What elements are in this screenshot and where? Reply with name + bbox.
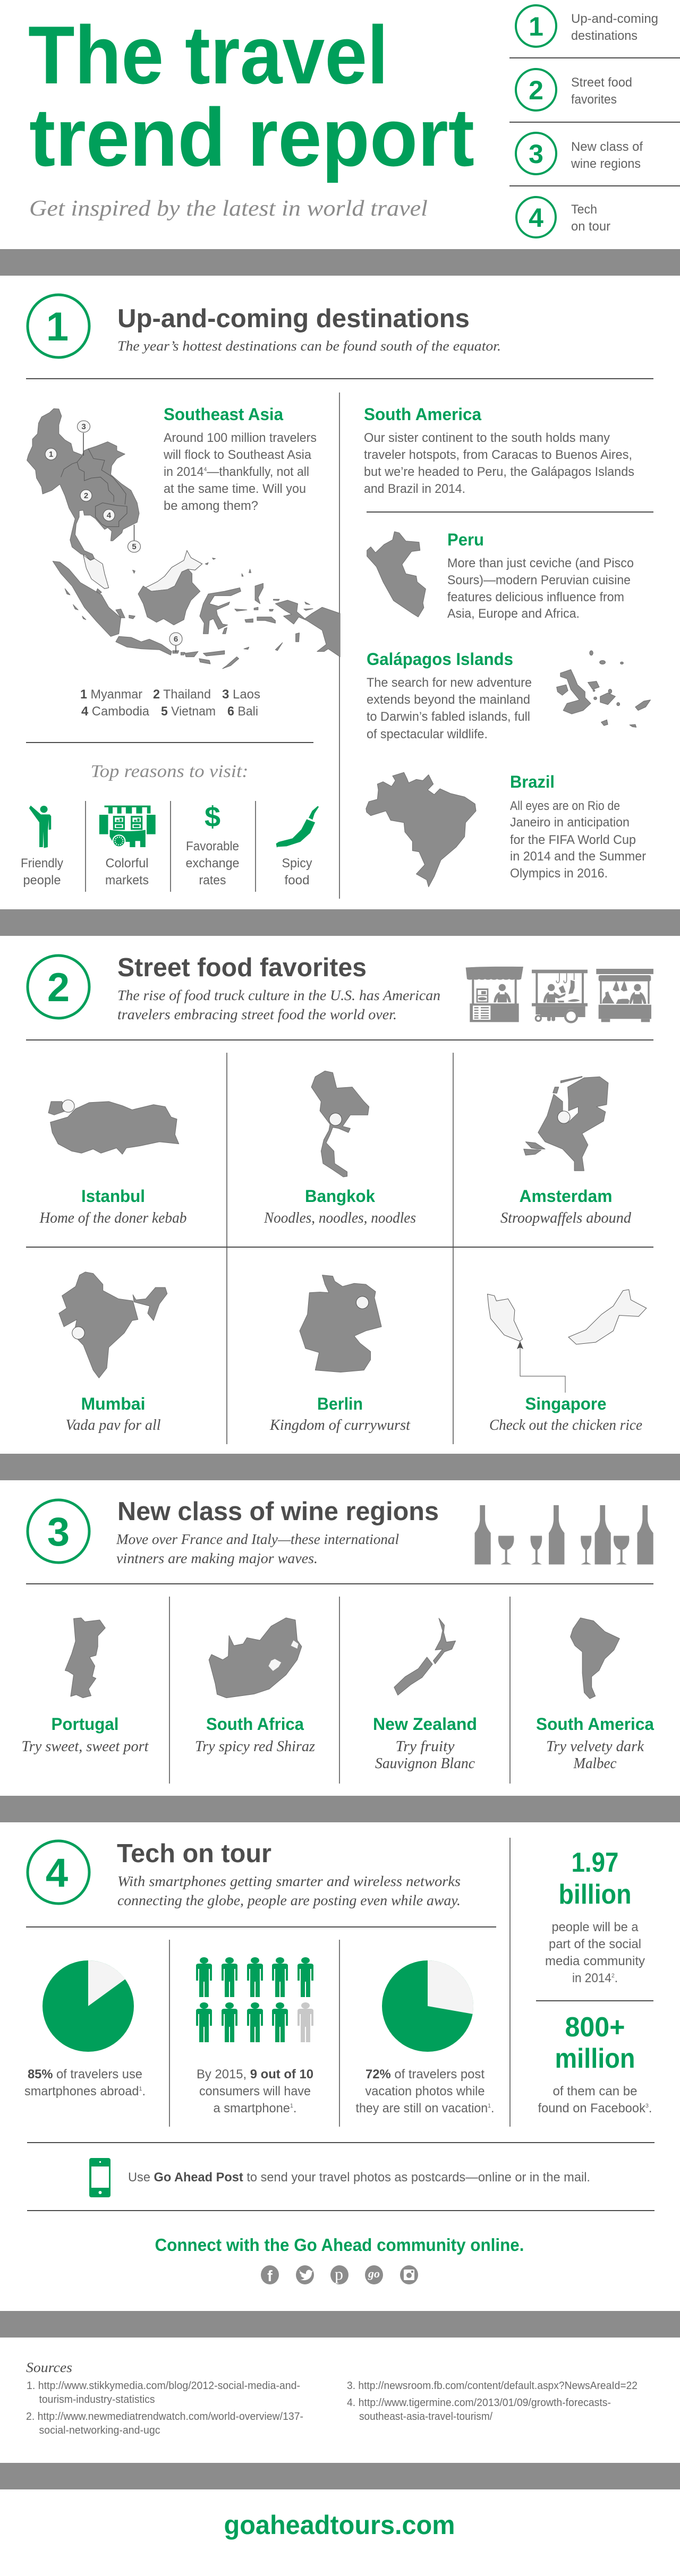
wine region: south america: South America: [536, 1715, 654, 1734]
stat: 1.97 billion: 1.97: [572, 1847, 618, 1878]
city: singapore: Singapore: [525, 1394, 607, 1413]
section number 4: [28, 1841, 89, 1904]
stat: 9 out of 10: a smartphone: [214, 2101, 291, 2116]
section 3 subhead: Move over France and Italy—these international: [116, 1531, 399, 1547]
stat: 85 percent: [24, 1960, 146, 2099]
wine region: new zealand: New Zealand: [373, 1715, 477, 1734]
reason: friendly people: [21, 806, 63, 888]
city: istanbul: [39, 1100, 187, 1226]
source 2: [26, 2411, 303, 2436]
stat: 9 out of 10: 1: [290, 2103, 293, 2109]
section 3 subhead: vintners are making major waves.: [116, 1550, 318, 1566]
city: istanbul: Istanbul: [81, 1187, 145, 1206]
section number 1: [28, 295, 89, 357]
sources: Sources: [26, 2360, 72, 2375]
peru text: Sours)—modern Peruvian cuisine: [447, 573, 631, 587]
map: southeast asia: [27, 408, 340, 669]
title: trend report: [29, 91, 474, 183]
source 1: [27, 2380, 300, 2406]
city: istanbul: Home of the doner kebab: [39, 1210, 187, 1226]
callouts: 3: [81, 422, 86, 431]
stat: 72 percent: vacation photos while: [366, 2084, 484, 2099]
wine region: south america: Malbec: [573, 1755, 617, 1772]
wine region: south america: Try velvety dark: [546, 1738, 644, 1755]
brazil text: [510, 772, 646, 881]
icon: waving person: [29, 806, 51, 848]
map: south america: [571, 1618, 619, 1699]
section number 2: [28, 956, 89, 1018]
icon: wine bottles and glasses: [475, 1505, 653, 1565]
pie chart: 85 percent: [42, 1960, 134, 2052]
map: portugal: [65, 1618, 105, 1698]
callouts: 4: [107, 511, 112, 520]
top reasons heading: Top reasons to visit:: [90, 762, 248, 781]
city: amsterdam: Stroopwaffels abound: [500, 1210, 632, 1226]
city: berlin: Kingdom of currywurst: [269, 1417, 411, 1434]
southeast asia text: [163, 405, 317, 513]
pie chart: 72 percent: [382, 1960, 473, 2052]
source 2: social-networking-and-ugc: [39, 2425, 160, 2436]
map: malaysia: [488, 1290, 647, 1344]
southeast asia text: Southeast Asia: [164, 405, 283, 424]
icon: facebook: f: [267, 2268, 273, 2285]
social icons: [261, 2264, 418, 2285]
section 4 subhead: [117, 1873, 461, 1908]
map: netherlands: [524, 1076, 608, 1171]
section 4 header: [28, 1839, 461, 1908]
toc item 3: [516, 133, 643, 174]
source 2: 2. http://www.newmediatrendwatch.com/world-overview/137-: [26, 2411, 303, 2423]
icon: chili pepper: [276, 806, 319, 848]
toc item 1: 1: [529, 12, 543, 41]
city: amsterdam: Amsterdam: [520, 1187, 612, 1206]
map: turkey: [48, 1100, 179, 1154]
map: india: [59, 1272, 167, 1378]
section 3 subhead: [116, 1531, 399, 1566]
icon: dollar sign: $: [205, 801, 220, 833]
map legend: 1 Myanmar: [80, 687, 142, 702]
toc item 4: [516, 197, 610, 237]
stat: 85 percent: 85% of travelers use: [28, 2067, 142, 2082]
connect heading: Connect with the Go Ahead community online.: [155, 2235, 524, 2255]
callouts: 2: [84, 491, 88, 500]
galapagos text: of spectacular wildlife.: [367, 727, 488, 741]
map: germany: [300, 1275, 381, 1372]
section 1 header: [28, 295, 501, 357]
stat: 1.97 billion: in 2014: [572, 1971, 614, 1985]
southeast asia text: be among them?: [164, 499, 258, 513]
southeast asia text: —thankfully, not all: [207, 465, 309, 479]
map: peru: [367, 532, 426, 617]
peru text: [447, 530, 634, 621]
sources: [26, 2360, 638, 2436]
stat: 1.97 billion: people will be a: [551, 1920, 639, 1934]
southeast asia text: in 2014: [164, 465, 206, 479]
icon: market cart: [99, 806, 156, 847]
wine region: new zealand: [373, 1618, 477, 1772]
wine region: south africa: Try spicy red Shiraz: [195, 1738, 315, 1755]
icon: pinterest: [330, 2264, 348, 2284]
south america intro: [364, 405, 634, 496]
stat: 800+ million: found on Facebook: [538, 2101, 647, 2116]
map legend: 2 Thailand: [153, 687, 211, 702]
peru text: Asia, Europe and Africa.: [447, 607, 580, 621]
wine region: new zealand: Sauvignon Blanc: [375, 1755, 475, 1772]
food grid dividers: [26, 1053, 653, 1444]
reason: spicy food: food: [285, 873, 309, 888]
stat: 85 percent: .: [142, 2084, 146, 2099]
reason: favorable exchange rates: [186, 801, 239, 888]
brazil text: Brazil: [510, 772, 555, 791]
stat: 72 percent: .: [491, 2101, 494, 2116]
toc item 1: [516, 5, 658, 47]
reason: friendly people: Friendly: [21, 856, 63, 871]
south america intro: South America: [364, 405, 481, 424]
peru text: features delicious influence from: [447, 590, 624, 604]
source 4: 4. http://www.tigermine.com/2013/01/09/growth-forecasts-: [347, 2397, 611, 2409]
toc item 4: 4: [529, 203, 543, 233]
source 4: [347, 2397, 611, 2423]
city: bangkok: Noodles, noodles, noodles: [264, 1210, 416, 1226]
city: mumbai: Vada pav for all: [66, 1417, 161, 1434]
southeast asia text: at the same time. Will you: [164, 482, 306, 496]
section number 4: 4: [46, 1850, 68, 1896]
stat: 72 percent: 72% of travelers post: [366, 2067, 484, 2082]
reason: spicy food: Spicy: [282, 856, 312, 871]
stat: 800+ million: [538, 2012, 652, 2116]
callouts: 6: [174, 635, 178, 644]
map: south africa: [209, 1618, 302, 1698]
southeast asia text: Around 100 million travelers: [164, 431, 317, 445]
icon: food stalls: [466, 967, 653, 1022]
wine region: portugal: Portugal: [51, 1715, 119, 1734]
map legend: 5 Vietnam: [161, 704, 216, 719]
icon: instagram: [400, 2265, 418, 2284]
map: new zealand: [394, 1618, 456, 1695]
brazil text: Janeiro in anticipation: [510, 815, 630, 830]
city: mumbai: [59, 1272, 167, 1434]
section 2 header: [28, 953, 440, 1022]
stall one: [466, 967, 523, 1022]
stat: 1.97 billion: media community: [545, 1954, 645, 1968]
stat: 9 out of 10: .: [293, 2101, 296, 2116]
southeast asia text: 4: [203, 466, 207, 473]
wine grid dividers: [169, 1597, 510, 1784]
stat: 800+ million: million: [555, 2043, 635, 2074]
wine region: portugal: [21, 1618, 149, 1755]
south america intro: and Brazil in 2014.: [364, 482, 465, 496]
stat: 9 out of 10: By 2015, 9 out of 10: [197, 2067, 313, 2082]
source 1: tourism-industry-statistics: [39, 2394, 155, 2406]
city: berlin: [269, 1275, 411, 1434]
city: singapore: Check out the chicken rice: [489, 1417, 642, 1434]
section number 1: 1: [46, 304, 69, 349]
wine region: south africa: [195, 1618, 315, 1755]
stat: 72 percent: 1: [488, 2103, 491, 2109]
galapagos text: The search for new adventure: [367, 676, 532, 690]
south america intro: traveler hotspots, from Caracas to Buenos Aires,: [364, 448, 632, 462]
toc item 1: Up-and-coming: [571, 12, 658, 26]
stat: 85 percent: 1: [139, 2086, 142, 2092]
icon: facebook: [261, 2265, 279, 2285]
city: amsterdam: [500, 1076, 632, 1226]
icon: go ahead: [365, 2265, 383, 2284]
stat: 1.97 billion: .: [615, 1971, 618, 1985]
map legend: [80, 687, 260, 719]
toc item 1: destinations: [571, 29, 638, 43]
heading: tech on tour: Tech on tour: [117, 1839, 271, 1868]
city: berlin: Berlin: [317, 1394, 363, 1413]
map legend: 3 Laos: [222, 687, 260, 702]
stat: 800+ million: 800+: [565, 2012, 625, 2043]
stat: 72 percent: [356, 1960, 494, 2116]
heading: new class of wine regions: New class of wine regions: [117, 1497, 439, 1526]
wine region: south africa: South Africa: [206, 1715, 304, 1734]
subtitle: Get inspired by the latest in world travel: [29, 197, 428, 221]
reason: favorable exchange rates: Favorable: [186, 839, 239, 854]
icon: twitter: [296, 2265, 314, 2284]
section number 3: 3: [47, 1509, 70, 1555]
section number 2: 2: [47, 965, 70, 1010]
city: singapore: [488, 1290, 647, 1434]
heading: up-and-coming destinations: Up-and-coming destinations: [117, 304, 470, 333]
table of contents: [509, 5, 680, 237]
south america intro: but we’re headed to Peru, the Galápagos Islands: [364, 465, 634, 479]
source 1: 1. http://www.stikkymedia.com/blog/2012-social-media-and-: [27, 2380, 300, 2392]
galapagos text: extends beyond the mainland: [367, 693, 530, 707]
stat: 1.97 billion: 2: [611, 1973, 615, 1979]
stat: 1.97 billion: part of the social: [549, 1937, 641, 1951]
icon: smartphone: [89, 2158, 110, 2197]
city: mumbai: Mumbai: [81, 1394, 146, 1413]
wine region: portugal: Try sweet, sweet port: [21, 1738, 149, 1755]
section 4 subhead: With smartphones getting smarter and wireless networks: [117, 1873, 461, 1889]
city: bangkok: Bangkok: [305, 1187, 375, 1206]
section 2 subhead: The rise of food truck culture in the U.S. has American: [117, 987, 440, 1003]
toc item 3: New class of: [571, 140, 643, 154]
toc item 2: [516, 69, 632, 110]
source 4: southeast-asia-travel-tourism/: [359, 2411, 492, 2423]
stat: 800+ million: .: [649, 2101, 652, 2116]
brazil text: in 2014 and the Summer: [510, 849, 646, 864]
title: [28, 9, 474, 183]
section 4 subhead: connecting the globe, people are posting even while away.: [117, 1892, 461, 1908]
section 2 subhead: travelers embracing street food the world over.: [117, 1006, 397, 1022]
reason: favorable exchange rates: exchange: [186, 856, 239, 871]
callouts: [45, 421, 182, 652]
galapagos text: to Darwin’s fabled islands, full: [367, 710, 530, 724]
reason: colorful markets: markets: [105, 873, 149, 888]
callouts: 5: [132, 542, 137, 551]
callouts: 1: [49, 450, 53, 459]
toc item 3: 3: [529, 139, 543, 169]
stat: 72 percent: they are still on vacation: [356, 2101, 492, 2116]
south america intro: Our sister continent to the south holds many: [364, 431, 610, 445]
reason: friendly people: people: [23, 873, 61, 888]
toc item 4: Tech: [571, 202, 597, 217]
toc item 3: wine regions: [571, 157, 641, 171]
icon: go ahead: go: [368, 2267, 380, 2280]
source 3: 3. http://newsroom.fb.com/content/default.aspx?NewsAreaId=22: [347, 2380, 638, 2392]
map: galapagos islands: [557, 651, 650, 727]
city: bangkok: [264, 1071, 416, 1226]
brazil text: All eyes are on Rio de: [510, 799, 620, 813]
pictogram: 10 people: [196, 1957, 313, 2042]
map legend: 4 Cambodia: [81, 704, 150, 719]
section 3 header: [28, 1497, 439, 1566]
stat: 9 out of 10: [196, 1957, 313, 2116]
heading: street food favorites: Street food favorites: [117, 953, 367, 982]
map: thailand: [311, 1071, 369, 1177]
galapagos text: [367, 650, 532, 741]
wine region: new zealand: Try fruity: [395, 1738, 455, 1755]
website url: goaheadtours.com: [224, 2510, 455, 2540]
southeast asia text: will flock to Southeast Asia: [163, 448, 312, 462]
section 1 subhead: The year’s hottest destinations can be found south of the equator.: [117, 338, 501, 354]
stat: 800+ million: 3: [645, 2103, 649, 2109]
stall two: [532, 970, 588, 1022]
title: The travel: [28, 9, 388, 101]
wine region: south america: [536, 1618, 654, 1772]
peru text: Peru: [447, 530, 484, 549]
reason: favorable exchange rates: rates: [199, 873, 226, 888]
toc item 2: favorites: [571, 92, 617, 107]
reason: colorful markets: [99, 806, 156, 888]
brazil text: for the FIFA World Cup: [510, 833, 636, 847]
stat: 1.97 billion: [545, 1847, 645, 1985]
map legend: 6 Bali: [227, 704, 258, 719]
stat: 1.97 billion: billion: [559, 1879, 631, 1910]
section number 3: [28, 1500, 89, 1563]
stat: 85 percent: smartphones abroad: [24, 2084, 141, 2099]
brazil text: Olympics in 2016.: [510, 866, 608, 881]
toc item 2: 2: [529, 75, 543, 105]
callout: go ahead post: Use Go Ahead Post to send your travel photos as postcards—online or in the mail.: [128, 2170, 590, 2185]
toc item 4: on tour: [571, 219, 610, 234]
arrow to singapore: [517, 1341, 565, 1393]
peru text: More than just ceviche (and Pisco: [447, 556, 634, 570]
map: brazil: [366, 772, 476, 887]
toc item 2: Street food: [571, 75, 632, 90]
reason: spicy food: [276, 806, 319, 888]
stat: 9 out of 10: consumers will have: [199, 2084, 311, 2099]
stall three: [596, 969, 653, 1022]
callout: go ahead post: [89, 2158, 590, 2197]
section 2 subhead: [117, 987, 440, 1022]
icon: pinterest: p: [335, 2264, 343, 2283]
galapagos text: Galápagos Islands: [367, 650, 513, 669]
stat: 800+ million: of them can be: [552, 2084, 638, 2099]
reason: colorful markets: Colorful: [105, 856, 149, 871]
